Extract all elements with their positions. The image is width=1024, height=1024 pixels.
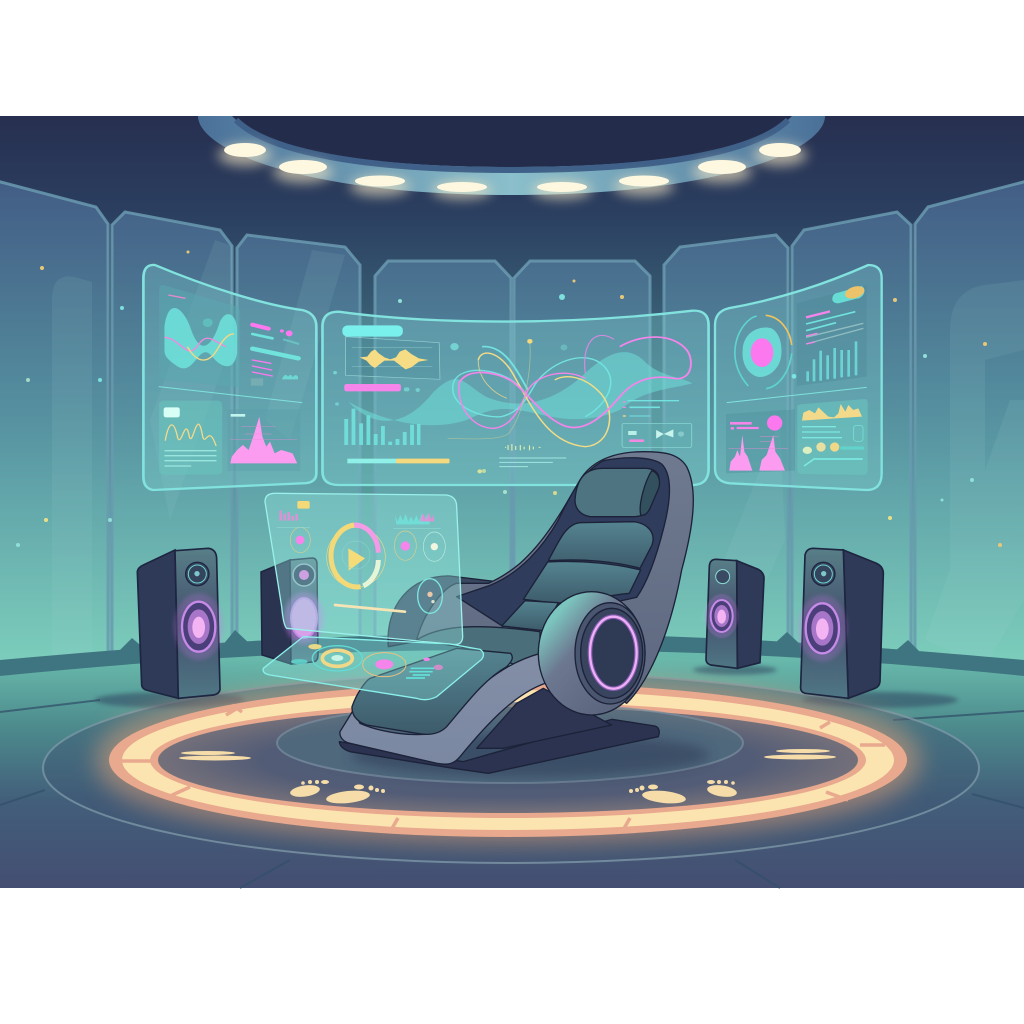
speaker shadows — [95, 665, 958, 708]
holographic control panel — [263, 493, 483, 700]
chair shadow — [350, 733, 710, 777]
radial gauge — [735, 315, 796, 389]
pink bar — [344, 384, 401, 391]
speaker: far left large — [137, 548, 224, 698]
back cushion lower — [502, 601, 558, 631]
glass wall panels — [0, 181, 1024, 672]
wave chart tile — [159, 285, 240, 387]
holo speaker reflection dials — [418, 579, 442, 613]
pink area chart tile — [228, 409, 300, 471]
glowing floor ring glow — [113, 694, 903, 826]
right screen text panel — [797, 284, 867, 386]
massage chair — [339, 452, 693, 773]
ceiling lights glow — [218, 144, 807, 199]
holo upright screen — [265, 493, 463, 645]
woofer glow — [174, 593, 224, 660]
console readouts — [291, 644, 443, 678]
left wall screen — [143, 265, 316, 490]
bar chart — [344, 409, 420, 445]
right screen yellow chart tile — [797, 399, 868, 475]
roller wheel — [538, 592, 645, 715]
floor outer ring — [43, 673, 979, 863]
holo small dials — [290, 527, 445, 561]
right screen bar chart — [806, 341, 857, 381]
upper seat cushion — [417, 627, 540, 664]
footprints right — [629, 749, 836, 805]
glowing floor ring — [109, 683, 907, 837]
back wall and ceiling — [0, 116, 1024, 676]
center wall screen — [322, 311, 709, 485]
floor — [0, 630, 1024, 888]
progress bar — [347, 459, 450, 463]
audio waveform box — [345, 337, 440, 379]
floating light particles — [16, 250, 1002, 547]
headrest cushion — [575, 468, 659, 517]
holo mini charts — [277, 501, 441, 528]
leg rest cushion — [352, 648, 512, 734]
chair gray frame — [340, 653, 545, 764]
right wall screen — [715, 265, 882, 490]
ceiling lights — [224, 143, 801, 192]
speaker: far right large — [797, 548, 883, 698]
wall panel reflections — [52, 240, 1024, 665]
rear armrest — [388, 576, 543, 647]
back cushion upper — [548, 522, 653, 568]
play gauge — [327, 525, 385, 587]
caption lines — [499, 458, 566, 467]
center heading bar — [342, 325, 403, 337]
right status lines — [623, 401, 679, 416]
base plate — [339, 719, 659, 773]
right screen pink chart tile — [726, 409, 795, 473]
inner floor circle — [277, 703, 743, 783]
accent dots — [333, 339, 567, 473]
support column — [477, 688, 612, 748]
small readout box — [622, 423, 692, 447]
inner back recess — [457, 458, 669, 627]
ceiling light ring — [198, 116, 825, 199]
speaker: rear right small — [705, 559, 764, 668]
back cushion middle — [523, 561, 641, 603]
footprints left — [179, 751, 385, 805]
left screen text lines — [251, 325, 299, 386]
mini waveform — [505, 444, 541, 451]
flowing wave — [348, 352, 692, 425]
yellow line chart tile — [159, 401, 222, 475]
speaker: rear left small — [261, 558, 324, 664]
chair back shell — [417, 452, 693, 703]
holo flat console — [263, 637, 483, 700]
infinity curves — [448, 335, 691, 447]
console dials — [312, 646, 406, 677]
holo slider — [335, 605, 405, 612]
